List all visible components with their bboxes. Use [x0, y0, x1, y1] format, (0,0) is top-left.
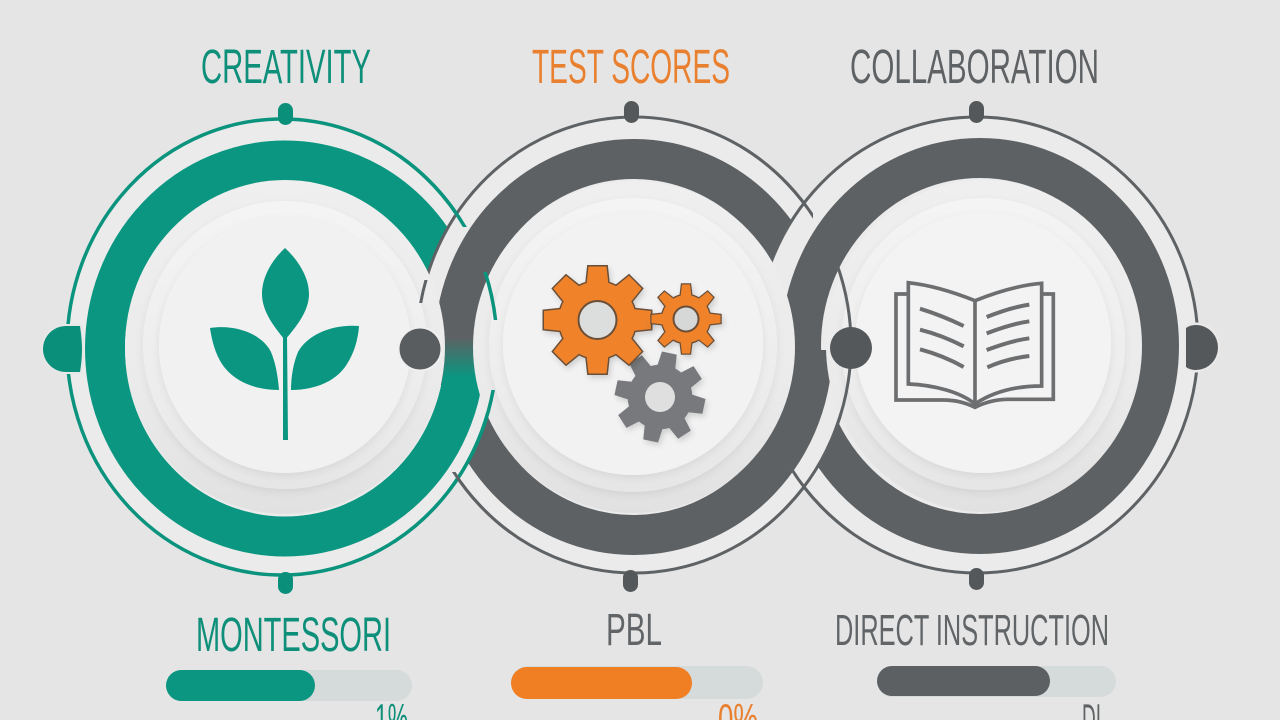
node: creativity left [43, 326, 82, 372]
thin ring crossings [400, 144, 852, 534]
gear: large orange [544, 266, 651, 374]
teal ring overlap [395, 341, 488, 544]
disc: creativity [125, 180, 445, 514]
progress bar: direct instruction [877, 666, 1116, 697]
heading: collaboration: COLLABORATION [850, 41, 1099, 94]
node: test scores left [398, 328, 442, 370]
circle: collaboration ring [756, 101, 1198, 590]
disc: collaboration [826, 180, 1142, 512]
progress bar: montessori [166, 670, 412, 701]
node: collaboration right [1186, 325, 1218, 370]
heading: test scores: TEST SCORES [532, 41, 730, 94]
test scores ring overlap [740, 350, 842, 546]
icon: gears [544, 266, 720, 450]
node: collaboration left [830, 327, 872, 369]
label: pbl: PBL [606, 604, 662, 655]
icon: open book [896, 283, 1053, 407]
circle: test scores ring [417, 101, 851, 592]
gear: small orange [648, 284, 720, 354]
progress bar: pbl [511, 666, 763, 699]
heading: creativity: CREATIVITY [201, 41, 371, 94]
gear: gray [607, 344, 713, 450]
label: montessori: MONTESSORI [196, 609, 391, 662]
disc: test scores [473, 181, 795, 513]
circle: creativity ring [67, 103, 497, 594]
icon: plant [210, 248, 359, 440]
